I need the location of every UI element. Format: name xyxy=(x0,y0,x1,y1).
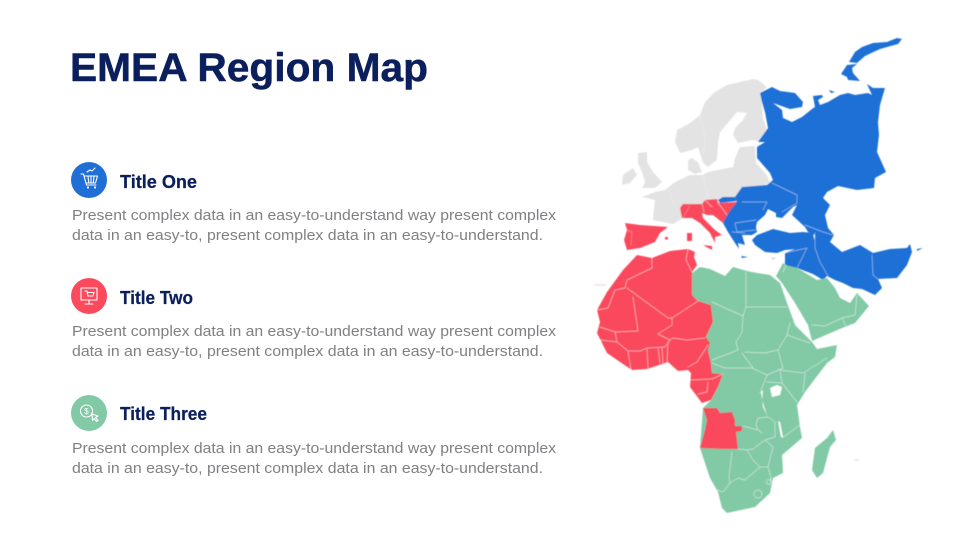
heading: title two: Title Two xyxy=(120,287,193,308)
heading: title one: Title One xyxy=(120,171,197,192)
region: grey western and northern europe xyxy=(622,79,770,224)
red islands xyxy=(665,233,712,250)
icon: dollar click: $ xyxy=(84,407,89,416)
region: blue eastern europe, russia and middle east xyxy=(723,84,912,295)
country borders xyxy=(597,115,878,498)
item three xyxy=(71,395,557,477)
text block one: data in an easy-to, present complex data in an easy-to-understand. xyxy=(72,227,543,244)
icon: shopping cart xyxy=(71,162,107,198)
region: green africa xyxy=(692,267,837,513)
region: red italy and central europe xyxy=(680,199,737,243)
text block two xyxy=(72,323,557,360)
text block three xyxy=(72,440,557,477)
stray small islands xyxy=(595,284,607,286)
item two xyxy=(71,278,557,360)
icon: dollar click xyxy=(71,395,107,431)
icon: computer cart xyxy=(71,278,107,314)
region: red spain xyxy=(624,223,668,250)
text block one xyxy=(72,207,557,244)
text block two: Present complex data in an easy-to-understand way present complex xyxy=(72,323,557,340)
text block two: data in an easy-to, present complex data in an easy-to-understand. xyxy=(72,343,543,360)
island: madagascar xyxy=(812,430,836,478)
text block three: Present complex data in an easy-to-understand way present complex xyxy=(72,440,557,457)
region: red north and west africa xyxy=(597,249,723,403)
blue slovakia xyxy=(718,197,737,203)
region: red angola xyxy=(700,408,742,449)
turkey xyxy=(752,229,815,253)
item one xyxy=(71,162,557,244)
region: green arabia xyxy=(776,263,869,341)
heading: title three: Title Three xyxy=(120,403,207,424)
islands: novaya zemlya xyxy=(741,38,923,258)
lakes xyxy=(761,385,783,437)
text block three: data in an easy-to, present complex data in an easy-to-understand. xyxy=(72,460,543,477)
map xyxy=(595,38,923,513)
title: EMEA Region Map xyxy=(70,46,428,90)
text block one: Present complex data in an easy-to-understand way present complex xyxy=(72,207,557,224)
